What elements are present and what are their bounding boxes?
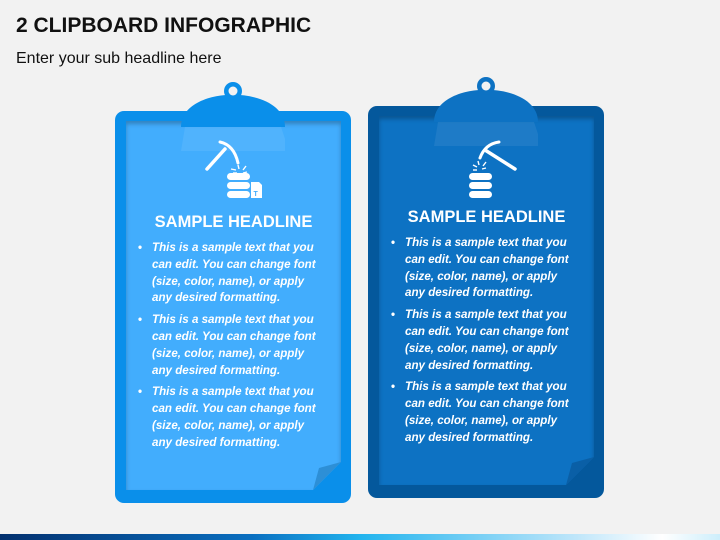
clipboard 1 bbox=[115, 111, 351, 503]
bullets 1: This is a sample text that you bbox=[152, 313, 314, 326]
bullets 2: This is a sample text that you bbox=[405, 308, 567, 321]
bullets 2: This is a sample text that you bbox=[405, 236, 567, 249]
bullets 1 bbox=[138, 241, 316, 449]
icon: pickaxe and database: T bbox=[254, 191, 258, 198]
paper 1 bbox=[126, 121, 341, 490]
bullets 2: This is a sample text that you bbox=[405, 380, 567, 393]
title: 2 CLIPBOARD INFOGRAPHIC bbox=[16, 14, 311, 37]
clipboard 2 bbox=[368, 106, 604, 498]
bullets 2: can edit. You can change font bbox=[405, 253, 569, 266]
bullets 2 bbox=[391, 236, 569, 444]
bullets 2: (size, color, name), or apply bbox=[405, 342, 557, 355]
bullets 1: This is a sample text that you bbox=[152, 241, 314, 254]
bottom gradient bar bbox=[0, 534, 720, 540]
bullets 1: any desired formatting. bbox=[152, 436, 280, 449]
bullets 2: can edit. You can change font bbox=[405, 397, 569, 410]
icon: pickaxe and database bbox=[469, 140, 517, 198]
bullets 2: any desired formatting. bbox=[405, 431, 533, 444]
bullets 2: (size, color, name), or apply bbox=[405, 270, 557, 283]
bullets 1: (size, color, name), or apply bbox=[152, 347, 304, 360]
bullets 1: (size, color, name), or apply bbox=[152, 419, 304, 432]
bullets 1: (size, color, name), or apply bbox=[152, 275, 304, 288]
bullets 2: can edit. You can change font bbox=[405, 325, 569, 338]
bullets 1: can edit. You can change font bbox=[152, 402, 316, 415]
paper 2 bbox=[379, 116, 594, 485]
bullets 2: any desired formatting. bbox=[405, 359, 533, 372]
bullets 1: This is a sample text that you bbox=[152, 385, 314, 398]
headline 2: SAMPLE HEADLINE bbox=[408, 208, 565, 226]
bullets 1: any desired formatting. bbox=[152, 364, 280, 377]
bullets 2: (size, color, name), or apply bbox=[405, 414, 557, 427]
bullets 1: any desired formatting. bbox=[152, 291, 280, 304]
page curl 2 bbox=[566, 457, 594, 485]
clip 1 bbox=[181, 82, 285, 151]
icon: pickaxe and database bbox=[205, 140, 262, 198]
bullets 2: any desired formatting. bbox=[405, 286, 533, 299]
subtitle: Enter your sub headline here bbox=[16, 50, 221, 67]
page curl 1 bbox=[313, 462, 341, 490]
bullets 1: can edit. You can change font bbox=[152, 258, 316, 271]
clip 2 bbox=[434, 77, 538, 146]
headline 1: SAMPLE HEADLINE bbox=[155, 213, 312, 231]
bullets 1: can edit. You can change font bbox=[152, 330, 316, 343]
